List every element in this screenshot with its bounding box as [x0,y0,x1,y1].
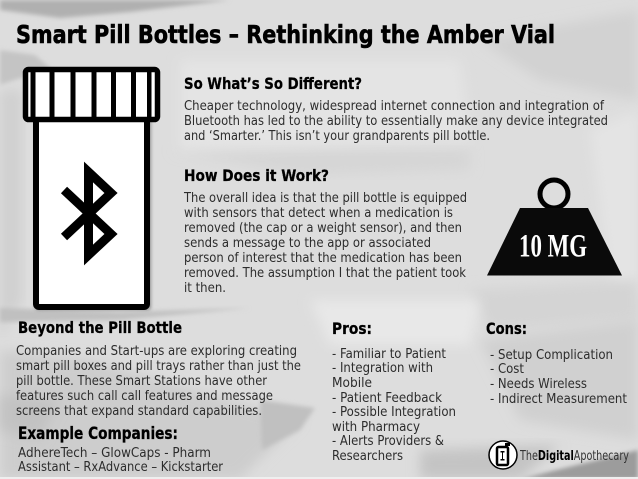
paragraph: it then. [184,280,226,296]
pros list: Researchers [332,448,403,464]
heading: So What’s So Different? [184,74,362,93]
pros list: - Patient Feedback [332,390,442,406]
paragraph: removed. The assumption I that the patient took [184,265,466,281]
section: pros [332,319,456,464]
paragraph: and ‘Smarter.’ This isn’t your grandparents pill bottle. [184,128,490,144]
heading: Cons: [486,319,527,338]
pros list [332,346,456,464]
pros list: Mobile [332,375,372,391]
section: so what's so different [184,74,608,144]
company list [18,445,223,475]
section: cons [486,319,627,407]
paragraph: sends a message to the app or associated [184,235,431,251]
heading: How Does it Work? [184,166,329,185]
paragraph: features such call call features and message [16,388,273,404]
cons list: - Needs Wireless [490,376,587,392]
heading: Example Companies: [18,424,178,443]
paragraph [184,98,608,144]
paragraph: The overall idea is that the pill bottle is equipped [183,190,467,206]
cons list [490,347,627,407]
company list: Assistant – RxAdvance – Kickstarter [18,459,223,475]
pros list: - Familiar to Patient [332,346,446,362]
bottle cap [26,70,158,120]
paragraph: screens that expand standard capabilities. [16,403,262,419]
bluetooth symbol [64,172,111,255]
logo mark [489,441,517,469]
paragraph: removed (the cap or a weight sensor), and then [184,220,462,236]
pros list: - Alerts Providers & [332,433,444,449]
cons list: - Cost [490,361,524,377]
paragraph: with sensors that detect when a medication is [184,205,453,221]
pros list: with Pharmacy [332,419,420,435]
section: example companies [18,424,223,475]
paragraph: person of interest that the medication has been [184,250,462,266]
icon: 10 mg weight [487,180,622,276]
company list: AdhereTech – GlowCaps - Pharm [18,445,211,461]
pros list: - Possible Integration [332,404,456,420]
cons list: - Setup Complication [490,347,613,363]
heading: Beyond the Pill Bottle [18,318,182,337]
logo: the digital apothecary [489,441,629,469]
icon: 10 mg weight: 10 MG [519,228,587,264]
section: how does it work [183,166,467,296]
pros list: - Integration with [332,360,433,376]
paragraph: pill bottle. These Smart Stations have other [16,373,267,389]
heading: Pros: [332,319,372,338]
paragraph [16,343,301,419]
section: beyond the pill bottle [16,318,301,419]
bottle body [36,115,147,307]
paragraph: Companies and Start-ups are exploring creating [16,343,297,359]
paragraph: smart pill boxes and pill trays rather than just the [16,358,301,374]
paragraph [183,190,467,296]
icon: pill bottle with bluetooth [26,70,158,310]
